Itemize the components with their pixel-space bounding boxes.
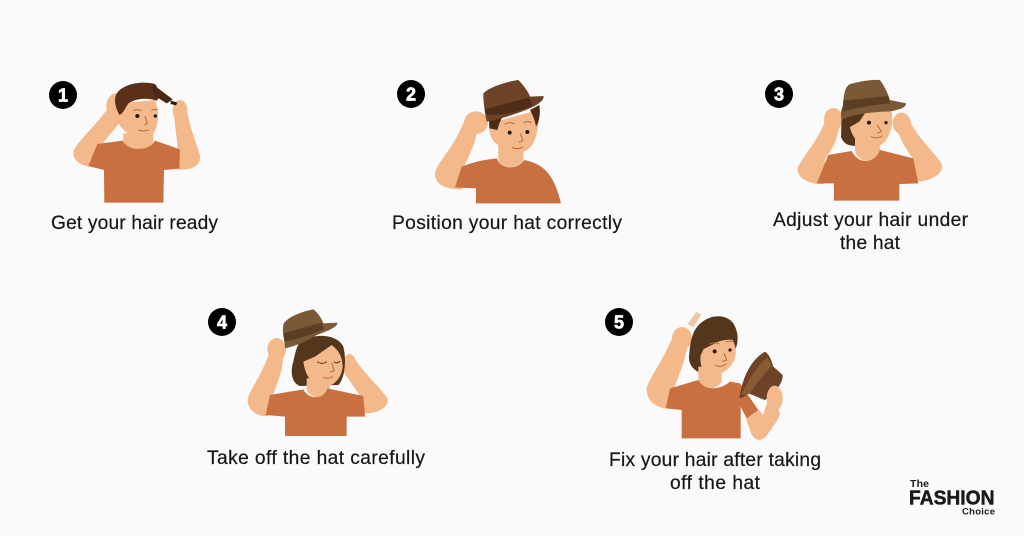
caption 3: Adjust your hair under [773, 210, 969, 231]
illustration: man combing hair [76, 83, 198, 203]
illustration: woman with comb holding hat [649, 312, 783, 438]
number badge 5: 5 [614, 312, 624, 332]
step 5: fix your hair after taking off the hat [605, 308, 821, 494]
logo: The Fashion Choice: The [910, 478, 929, 490]
number badge 5 [605, 308, 633, 336]
logo: The Fashion Choice: Choice [962, 506, 995, 518]
number badge 3 [765, 80, 793, 108]
illustration: man placing hat [437, 80, 561, 203]
logo: The Fashion Choice [909, 478, 995, 518]
step 1: get your hair ready [49, 81, 218, 234]
caption 5 [609, 450, 821, 494]
number badge 1: 1 [58, 86, 68, 106]
caption 5: off the hat [670, 473, 761, 494]
illustration: woman adjusting hair [800, 80, 940, 201]
number badge 3: 3 [774, 84, 784, 104]
number badge 2: 2 [406, 84, 416, 104]
step 4: take off the hat carefully [207, 308, 425, 469]
number badge 4: 4 [217, 312, 227, 332]
caption 5: Fix your hair after taking [609, 450, 821, 471]
caption 3: the hat [840, 233, 901, 254]
step 2: position your hat correctly [392, 80, 622, 234]
caption 4: Take off the hat carefully [207, 448, 425, 469]
step 3: adjust your hair under the hat [765, 80, 969, 254]
number badge 4 [208, 308, 236, 336]
number badge 1 [49, 81, 77, 109]
number badge 2 [397, 80, 425, 108]
illustration: woman lifting hat [250, 309, 385, 436]
caption 3 [773, 210, 969, 254]
caption 1: Get your hair ready [51, 213, 218, 234]
logo: The Fashion Choice: FASHION [909, 486, 994, 510]
caption 2: Position your hat correctly [392, 213, 622, 234]
